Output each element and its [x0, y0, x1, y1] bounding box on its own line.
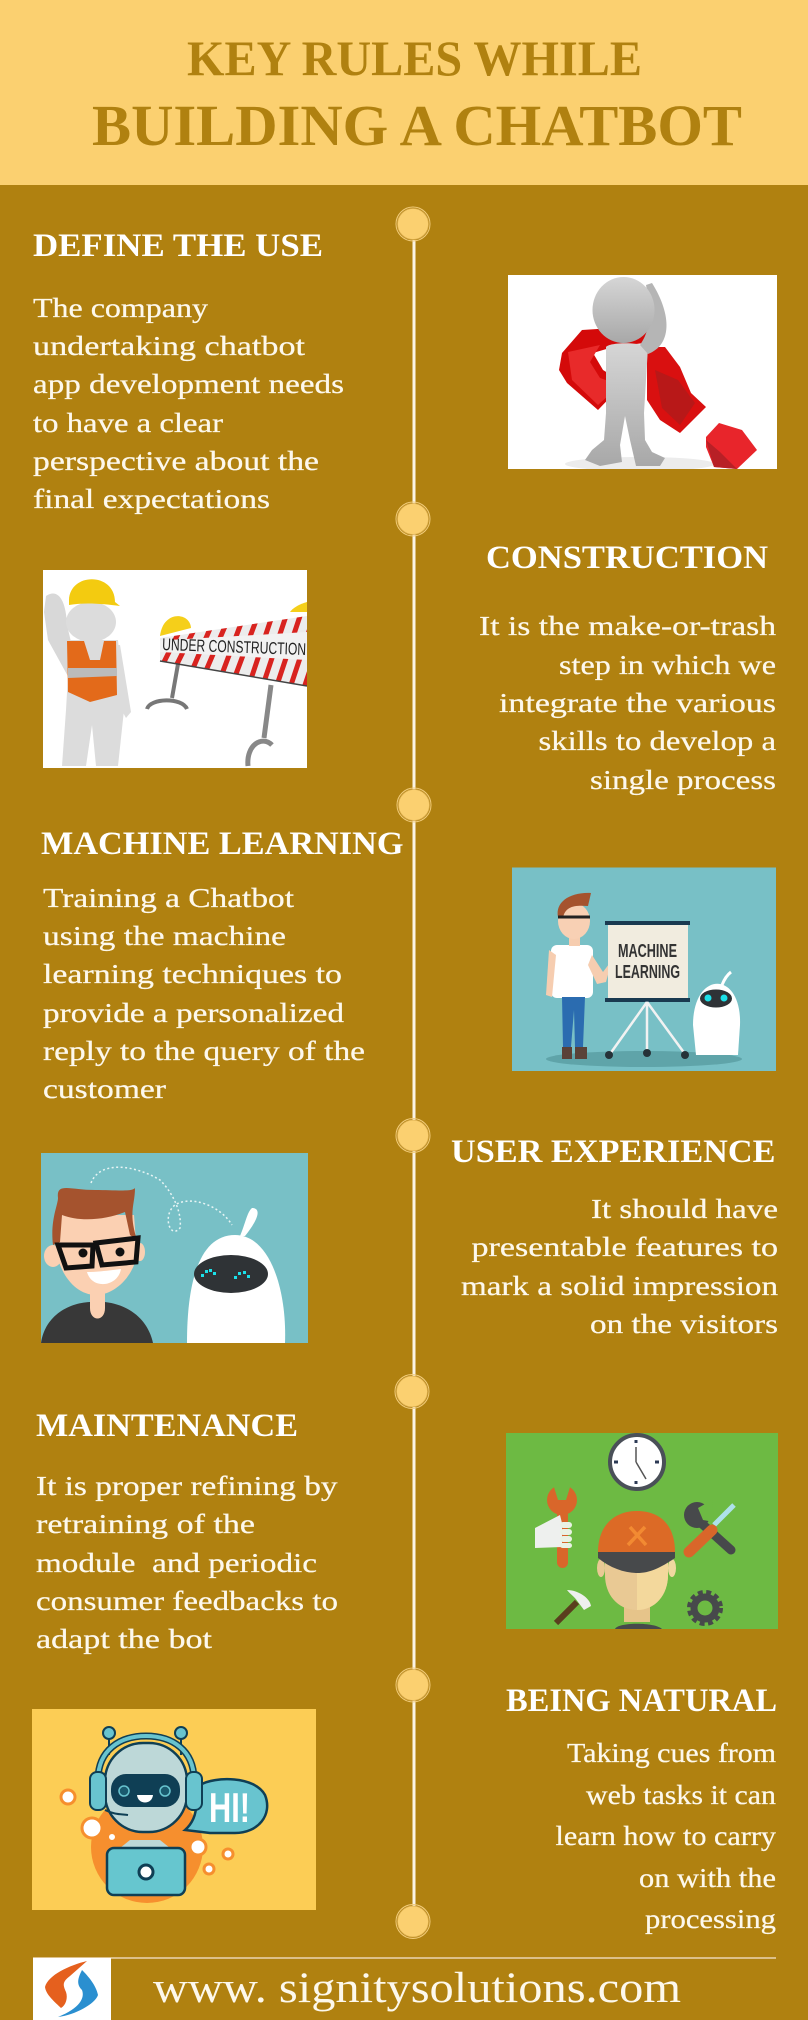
image: maintenance worker and tools [506, 1433, 778, 1629]
image: person with question mark [508, 275, 777, 471]
body text: single process [590, 765, 776, 795]
body text: It is the make-or-trash [479, 611, 777, 641]
section: define the use [33, 228, 344, 514]
footer [33, 1957, 776, 2020]
body text: step in which we [559, 650, 776, 680]
body text: final expectations [33, 484, 270, 514]
body text: mark a solid impression [461, 1271, 779, 1301]
image: under construction worker [43, 570, 330, 768]
body text: The company [33, 293, 209, 323]
heading: CONSTRUCTION [486, 540, 768, 576]
title: BUILDING A CHATBOT [92, 93, 742, 158]
board text: LEARNING [615, 962, 680, 982]
body text: provide a personalized [43, 998, 345, 1028]
heading: USER EXPERIENCE [451, 1134, 776, 1170]
body text: reply to the query of the [43, 1036, 365, 1066]
body text: customer [43, 1074, 166, 1104]
body text: perspective about the [33, 446, 319, 476]
body text: to have a clear [33, 408, 223, 438]
section: being natural [506, 1683, 777, 1934]
body text: web tasks it can [586, 1780, 777, 1810]
bubble text: HI! [209, 1784, 250, 1831]
body text [556, 1738, 777, 1934]
body text: adapt the bot [36, 1624, 213, 1654]
body text: It is proper refining by [36, 1471, 338, 1501]
logo [33, 1958, 111, 2020]
heading: MAINTENANCE [36, 1408, 298, 1444]
section: user experience [451, 1134, 779, 1339]
board text: MACHINE [618, 941, 677, 961]
title [92, 30, 742, 158]
heading: DEFINE THE USE [33, 228, 323, 264]
body text: learn how to carry [556, 1821, 777, 1851]
body text: module and periodic [36, 1548, 317, 1578]
body text [479, 611, 777, 795]
body text: undertaking chatbot [33, 331, 306, 361]
heading: MACHINE LEARNING [41, 826, 404, 862]
title: KEY RULES WHILE [187, 30, 642, 86]
header band [0, 0, 808, 185]
body text [43, 883, 365, 1104]
image: machine learning presenter [512, 868, 776, 1071]
body text [33, 293, 344, 514]
body text: Training a Chatbot [43, 883, 295, 913]
body text: on the visitors [590, 1309, 778, 1339]
body text [36, 1471, 338, 1654]
body text: It should have [591, 1194, 778, 1224]
body text: Taking cues from [567, 1738, 776, 1768]
timeline [395, 207, 431, 1938]
sign text: UNDER CONSTRUCTION [162, 635, 306, 659]
body text: retraining of the [36, 1509, 255, 1539]
heading: BEING NATURAL [506, 1683, 777, 1719]
section: construction [479, 540, 777, 795]
body text: processing [645, 1904, 776, 1934]
image: robot saying hi [32, 1709, 316, 1910]
body text: consumer feedbacks to [36, 1586, 338, 1616]
board text [615, 941, 680, 982]
body text: skills to develop a [538, 726, 776, 756]
body text: using the machine [43, 921, 286, 951]
body text: on with the [639, 1863, 776, 1893]
body text: integrate the various [499, 688, 776, 718]
body text: learning techniques to [43, 959, 342, 989]
body text: presentable features to [472, 1232, 778, 1262]
body text [461, 1194, 779, 1339]
image: man and robot [41, 1153, 308, 1343]
body text: app development needs [33, 369, 344, 399]
website url: www. signitysolutions.com [153, 1965, 681, 2012]
section: machine learning [41, 826, 404, 1104]
section: maintenance [36, 1408, 338, 1654]
